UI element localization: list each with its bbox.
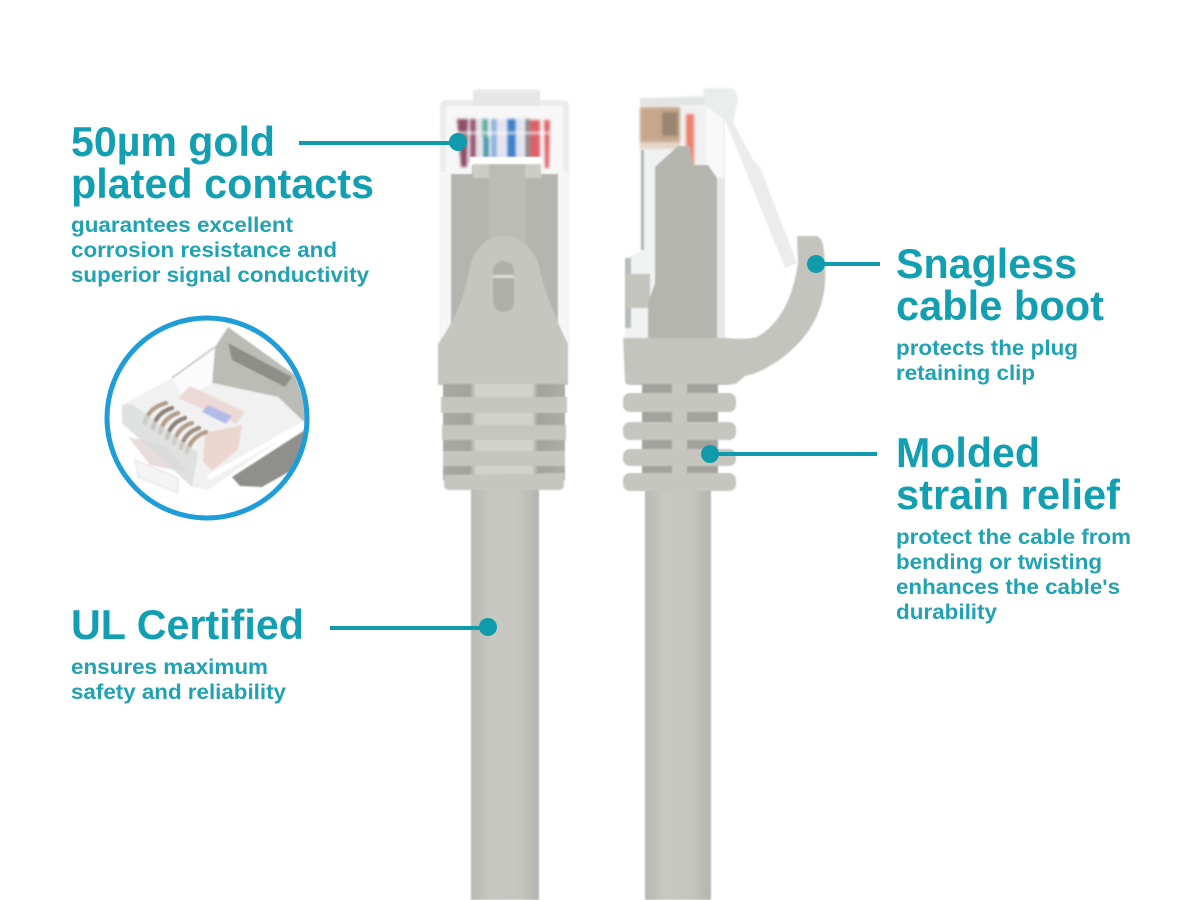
cable: side connector — [645, 485, 711, 900]
callout: molded strain relief — [701, 429, 1131, 624]
pink and blue wires — [178, 386, 245, 424]
leader line: gold contacts — [299, 133, 467, 151]
text: UL certified description: safety and reliability — [71, 681, 286, 704]
gold pins — [145, 403, 206, 452]
gold contact — [640, 107, 694, 166]
callout: gold contacts — [71, 118, 467, 287]
heading: snagless cable boot: Snagless — [896, 240, 1077, 287]
boot with arch and slot — [438, 236, 568, 386]
snagless boot and hook — [623, 236, 825, 385]
callout: snagless boot — [807, 240, 1104, 385]
coloured contact wires — [457, 119, 550, 168]
clear plug housing — [440, 89, 569, 345]
leader line: snagless boot — [807, 255, 880, 273]
text: strain relief description: enhances the cable's — [896, 576, 1120, 599]
clear body — [125, 378, 302, 490]
heading: molded strain relief — [896, 429, 1121, 518]
text: UL certified description — [71, 656, 286, 704]
heading: molded strain relief: Molded — [896, 429, 1040, 476]
leader line: strain relief — [701, 445, 877, 463]
heading: UL certified: UL Certified — [71, 601, 304, 648]
left connector, front view — [438, 89, 569, 900]
heading: molded strain relief: strain relief — [896, 471, 1121, 518]
text: gold contacts description — [71, 214, 369, 287]
latch — [451, 164, 558, 345]
white retaining clip — [703, 88, 797, 268]
cable: front connector — [471, 485, 539, 900]
text: snagless boot description: protects the plug — [896, 337, 1078, 360]
text: strain relief description — [896, 526, 1131, 624]
text: strain relief description: protect the cable from — [896, 526, 1131, 549]
strain relief ribs — [623, 384, 736, 491]
strain relief ribs — [441, 384, 567, 490]
heading: snagless cable boot — [896, 240, 1104, 329]
front edge — [122, 404, 198, 487]
leader line: UL certified — [330, 618, 497, 636]
white band under wires — [470, 157, 542, 166]
text: strain relief description: durability — [896, 601, 997, 624]
grey side latch — [648, 146, 717, 340]
inset: connector close-up — [107, 318, 310, 518]
heading: gold plated contacts: plated contacts — [71, 160, 374, 207]
rear latch — [212, 327, 310, 423]
text: UL certified description: ensures maximum — [71, 656, 268, 679]
text: snagless boot description — [896, 337, 1078, 385]
right connector, side view — [623, 88, 825, 900]
callout: UL certified — [71, 601, 497, 704]
bottom clip — [135, 460, 178, 493]
text: strain relief description: bending or twisting — [896, 551, 1102, 574]
heading: snagless cable boot: cable boot — [896, 282, 1104, 329]
text: gold contacts description: superior signal conductivity — [71, 264, 369, 287]
text: gold contacts description: corrosion resistance and — [71, 239, 337, 262]
heading: gold plated contacts — [71, 118, 374, 207]
text: snagless boot description: retaining clip — [896, 362, 1035, 385]
rear boot shadow — [232, 430, 305, 487]
clear plug body — [625, 95, 725, 340]
text: gold contacts description: guarantees excellent — [71, 214, 293, 237]
heading: gold plated contacts: 50µm gold — [71, 118, 275, 165]
